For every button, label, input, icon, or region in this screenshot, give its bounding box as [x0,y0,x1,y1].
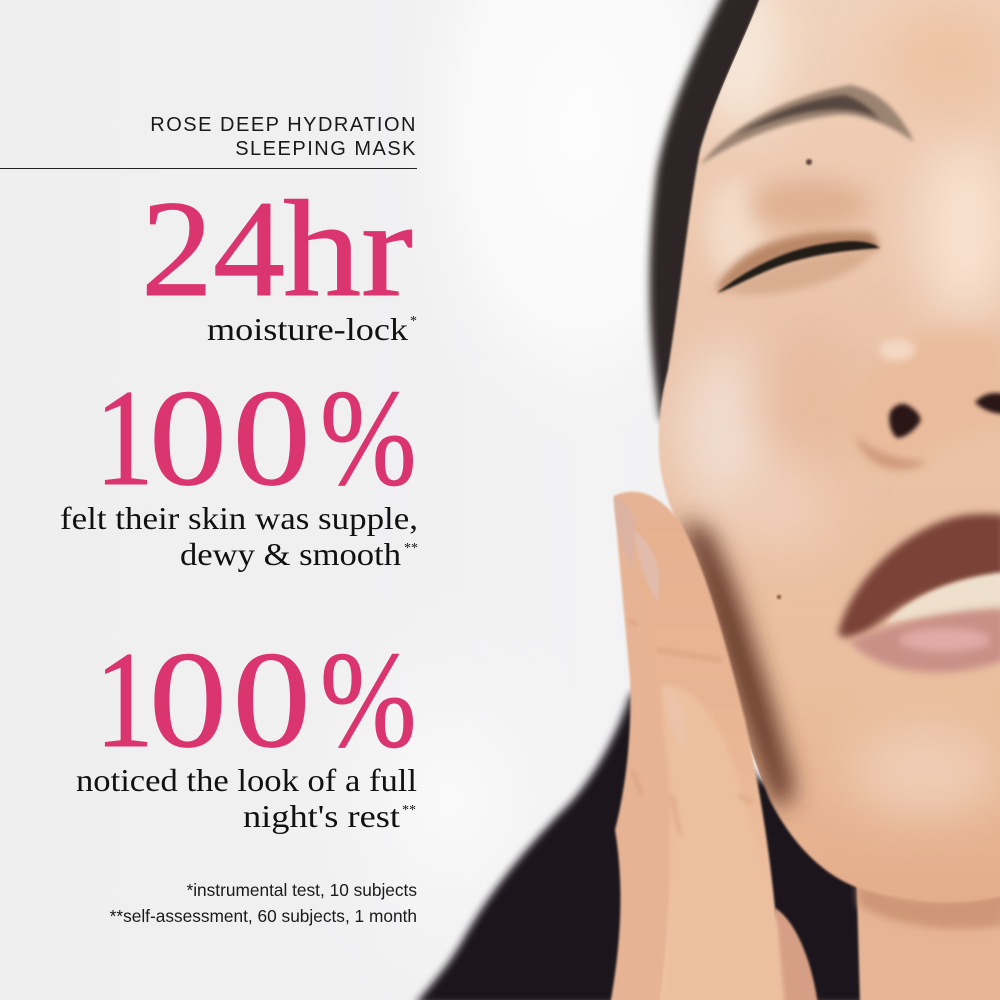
stat: 100% rest: 00 [149,623,311,776]
lower hair [415,680,870,1000]
heading: SLEEPING MASK [235,138,417,160]
background light glow [390,0,770,460]
lips [838,514,1000,672]
stat: 24hr: moisture-lock [207,311,408,347]
skin shading [675,0,1000,815]
eyebrow [700,85,914,165]
closed eye [716,231,880,295]
upper hair [650,0,790,420]
rear palm [770,908,818,1000]
stat: 100% supple: dewy & smooth [180,536,401,572]
stat: 100% rest: night's rest [243,798,400,834]
stat: 24hr [141,172,417,347]
stat: 100% rest [76,623,417,834]
heading rule [0,168,417,169]
first finger [610,492,700,1000]
stat: 100% supple: 1 [95,361,154,514]
photo: woman's face with hand on cheek [415,0,1000,1000]
stat: 24hr: 24 [141,172,285,325]
stat: 100% supple: % [320,361,417,514]
stat: 100% supple [60,361,418,572]
stat: 24hr: * [410,314,417,329]
second finger [634,519,780,1000]
stat: 24hr: hr [283,172,413,325]
knuckle creases [628,620,752,835]
third finger [660,685,785,1000]
face [659,0,1000,902]
stat: 100% rest: 1 [95,623,154,776]
footnotes: *instrumental test, 10 subjects [186,880,417,900]
small mole on cheek [777,595,781,599]
mole [806,159,812,165]
neck [856,860,1000,1000]
hand with fingers [610,492,818,1000]
stat: 100% supple: ** [404,541,418,556]
heading: ROSE DEEP HYDRATION [150,114,417,136]
stat: 100% rest: ** [402,803,416,818]
background lower glow [270,580,630,1000]
stat: 100% rest: % [320,623,417,776]
stat: 100% rest: noticed the look of a full [76,762,417,798]
nose [853,331,1000,469]
stat: 100% supple: felt their skin was supple, [60,500,418,536]
neck shadow under jaw [858,880,1000,929]
footnotes: **self-assessment, 60 subjects, 1 month [110,906,417,926]
fingernails [614,496,636,568]
stat: 100% supple: 00 [149,361,311,514]
